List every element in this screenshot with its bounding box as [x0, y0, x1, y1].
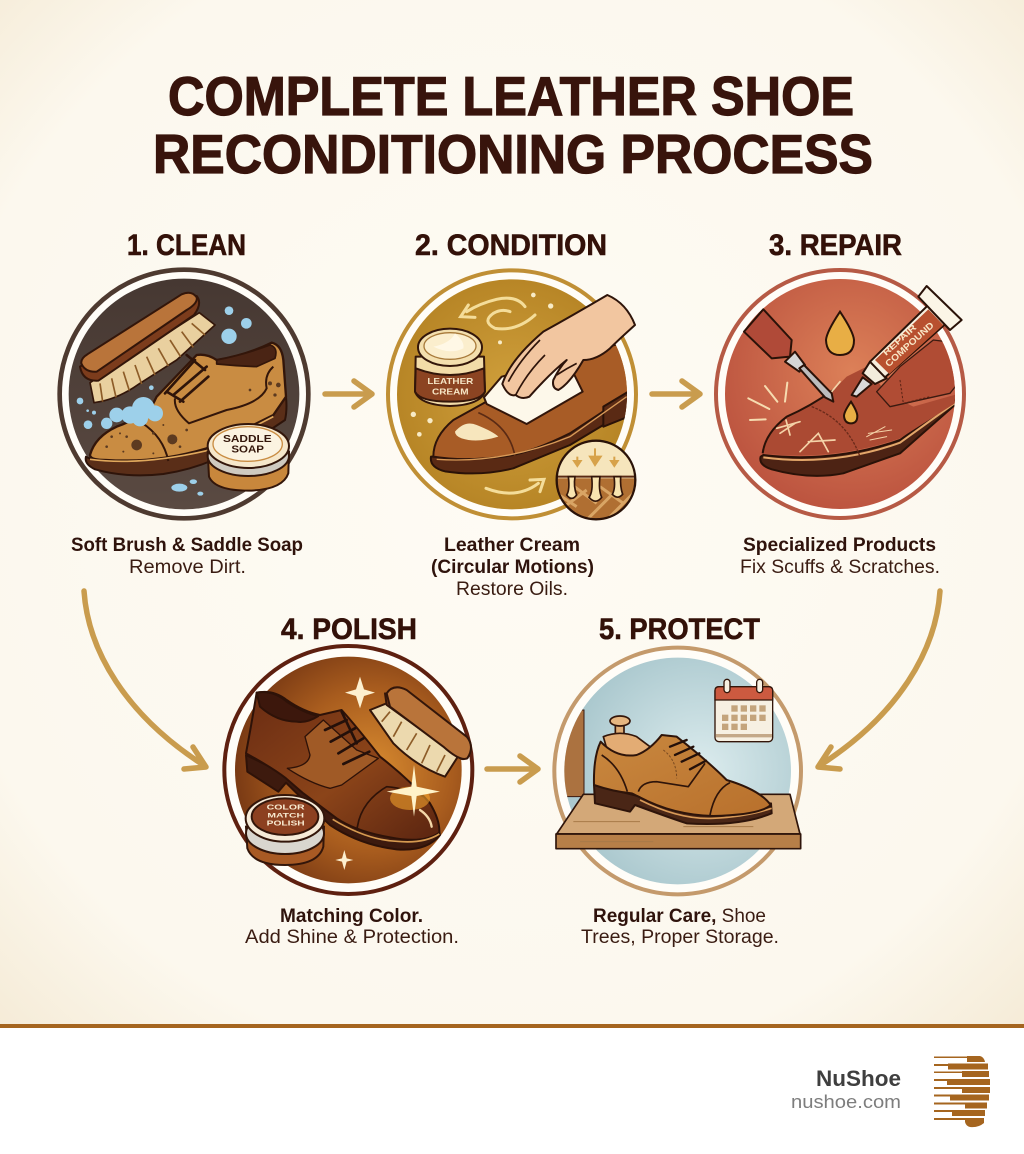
- icon: hand: [502, 295, 635, 398]
- icon: cloth: [484, 359, 583, 424]
- icon: cream jar: [415, 329, 485, 406]
- panel: step 4 polish: [224, 613, 472, 948]
- icon: colour polish tin: [246, 795, 324, 865]
- icon: wooden post: [564, 710, 584, 798]
- caption: step 3: [740, 535, 940, 578]
- arrow: step 4 to 5: [487, 756, 538, 782]
- icon: shoe: [594, 735, 772, 824]
- icon: saddle soap tin: SADDLE: [223, 434, 272, 445]
- title: COMPLETE LEATHER SHOE: [168, 65, 854, 127]
- icon: glossy shoe: [246, 692, 440, 850]
- caption: step 5: Trees, Proper Storage.: [581, 927, 779, 948]
- icon: cream jar: CREAM: [432, 386, 469, 396]
- illustration: polished shoe: [224, 646, 472, 894]
- icon: dirty shoe: [86, 343, 286, 475]
- caption: step 3: Fix Scuffs & Scratches.: [740, 557, 940, 578]
- title: [153, 65, 873, 185]
- caption: step 5: [581, 906, 779, 948]
- panel: step 3 repair: [716, 229, 964, 578]
- panel: step 2 condition: [388, 229, 638, 600]
- icon: colour polish tin: MATCH: [267, 812, 305, 819]
- caption: step 5: Regular Care, Shoe: [593, 906, 766, 927]
- icon: sparkles: [335, 677, 440, 870]
- heading: 5. protect: 5. PROTECT: [599, 613, 760, 646]
- panel: step 1 clean: [60, 229, 308, 578]
- icon: circular motion arrows: [461, 298, 544, 493]
- caption: step 4: [245, 906, 459, 948]
- icon: calendar: [715, 679, 773, 742]
- icon: NuShoe foot logo: [934, 1056, 990, 1127]
- brand: NuShoe wordmark: [791, 1066, 901, 1112]
- heading: 3. repair: 3. REPAIR: [769, 229, 902, 262]
- illustration: hand applying cream: [388, 270, 638, 520]
- icon: colour polish tin: POLISH: [267, 820, 305, 827]
- caption: step 2: Leather Cream: [444, 535, 580, 556]
- caption: step 2: Restore Oils.: [456, 579, 568, 600]
- caption: step 1: Remove Dirt.: [129, 557, 246, 578]
- caption: step 4: Add Shine & Protection.: [245, 927, 459, 948]
- icon: saddle soap tin: SOAP: [231, 444, 264, 455]
- icon: colour polish tin: COLOR: [267, 804, 305, 811]
- arrow: step 2 to 3: [652, 381, 700, 407]
- icon: repair compound tube: COMPOUND: [883, 320, 936, 369]
- icon: repair compound tube: REPAIR: [881, 322, 919, 357]
- arrow: step 1 to 2: [325, 381, 372, 407]
- icon: scuffed shoe: [760, 340, 963, 476]
- caption: step 4: Matching Color.: [280, 906, 423, 927]
- illustration: repairing scuffs: [716, 270, 964, 518]
- icon: repair tool: [744, 309, 833, 402]
- caption: step 1: [71, 535, 303, 578]
- illustration: brush, shoe and saddle soap: [60, 270, 308, 518]
- icon: polish brush: [370, 687, 471, 777]
- icon: wooden shelf: [556, 794, 801, 849]
- icon: scratches and sparks: [748, 382, 892, 452]
- caption: step 2: [431, 535, 594, 600]
- icon: shoe tree: [603, 716, 650, 760]
- caption: step 1: Soft Brush & Saddle Soap: [71, 535, 303, 556]
- icon: saddle soap tin: [208, 424, 289, 491]
- arrow: step 3 curving to step 5: [818, 591, 940, 769]
- arrow: step 1 curving to step 4: [84, 591, 206, 769]
- icon: cream jar: LEATHER: [427, 376, 473, 386]
- heading: 4. polish: 4. POLISH: [281, 613, 417, 646]
- title: RECONDITIONING PROCESS: [153, 123, 873, 185]
- brand: NuShoe wordmark: NuShoe: [816, 1066, 901, 1091]
- heading: 1. clean: 1. CLEAN: [127, 229, 246, 262]
- brand: NuShoe wordmark: nushoe.com: [791, 1092, 901, 1112]
- icon: foam and bubbles: [77, 306, 252, 496]
- icon: brush: [80, 293, 215, 403]
- icon: oil drops: [826, 312, 857, 423]
- caption: step 3: Specialized Products: [743, 535, 936, 556]
- icon: laces: [325, 712, 369, 764]
- panel: step 5 protect: [554, 613, 801, 948]
- icon: inset of leather pores: [555, 440, 638, 520]
- icon: shoe: [431, 340, 633, 473]
- heading: 2. condition: 2. CONDITION: [415, 229, 607, 262]
- icon: repair compound tube: [852, 286, 962, 397]
- caption: step 2: (Circular Motions): [431, 557, 594, 578]
- illustration: shoe stored on shelf: [554, 648, 801, 894]
